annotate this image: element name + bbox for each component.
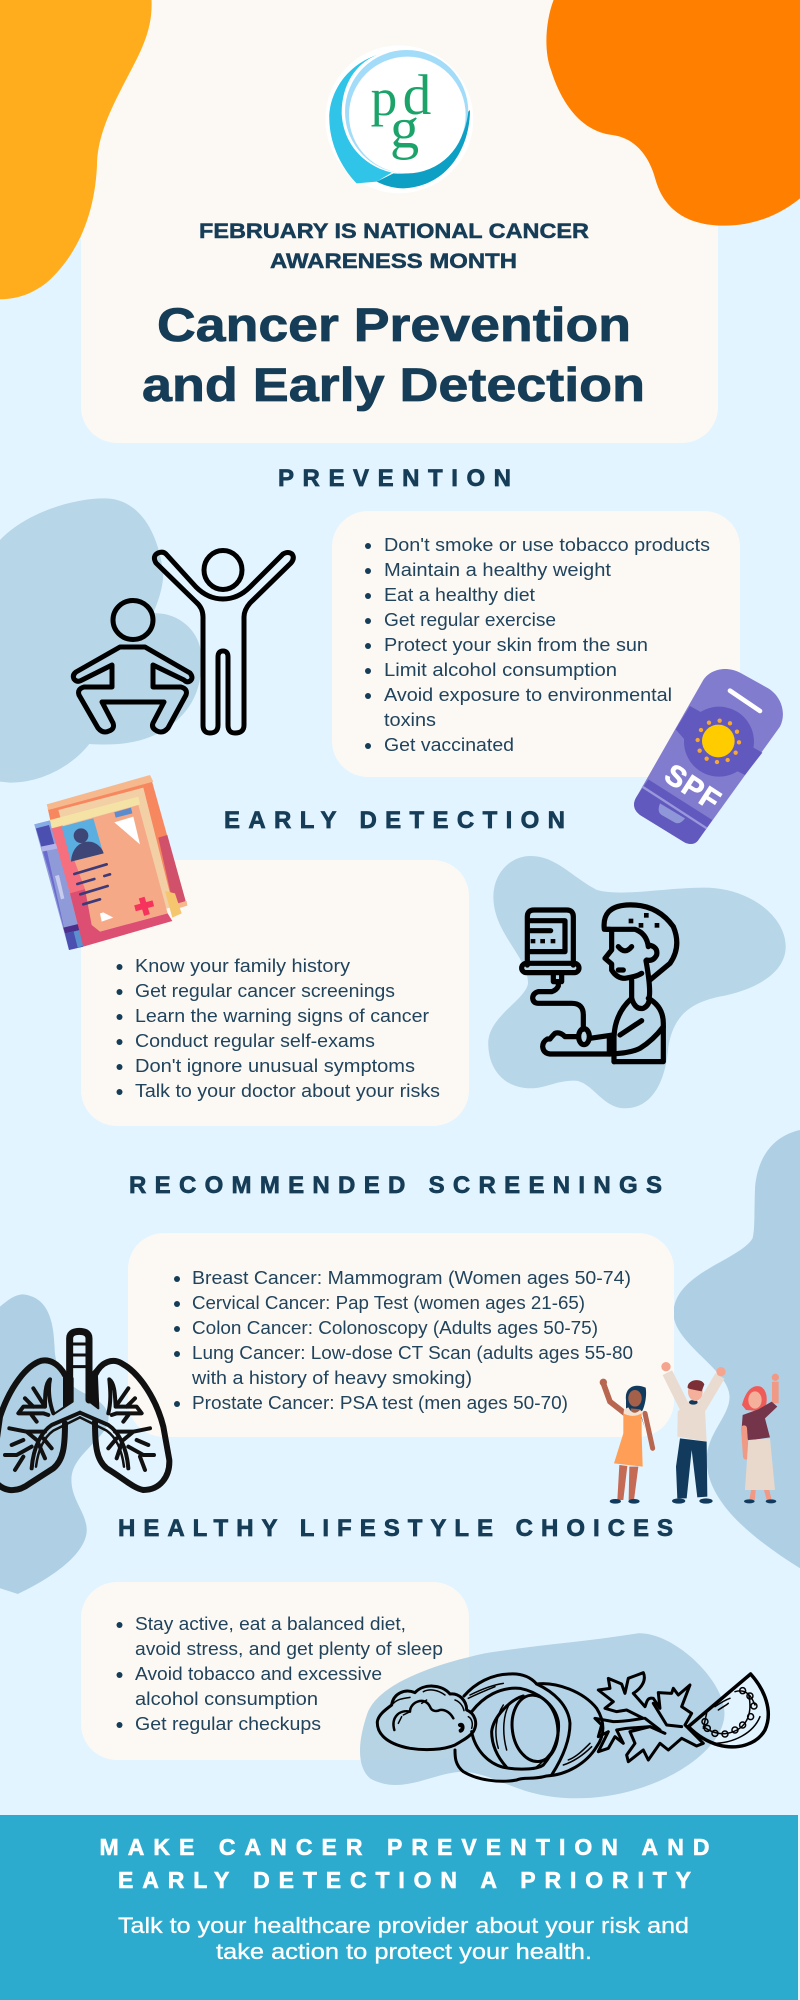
list text: Prostate Cancer: PSA test (men ages 50-70) (192, 1393, 568, 1413)
list text: Know your family history (135, 956, 350, 976)
icon: lungs (0, 1331, 169, 1490)
list text: Avoid tobacco and excessive (135, 1664, 382, 1684)
list text: Eat a healthy diet (384, 585, 535, 605)
panel: healthy lifestyle list (81, 1582, 469, 1760)
list text: alcohol consumption (135, 1689, 318, 1709)
decorative blob: orange top right (546, 0, 800, 226)
list text: Lung Cancer: Low-dose CT Scan (adults ages 55-80 (192, 1343, 633, 1363)
heading: recommended screenings: RECOMMENDED SCREENINGS (129, 1172, 662, 1199)
icon: SPF sunscreen tube (634, 669, 783, 844)
title (142, 298, 645, 411)
list text: Get vaccinated (384, 735, 514, 755)
onion (455, 1674, 603, 1781)
icon: exercising people (73, 550, 293, 733)
list text: Don't smoke or use tobacco products (384, 535, 710, 555)
list text: Colon Cancer: Colonoscopy (Adults ages 50-75) (192, 1318, 598, 1338)
icon: medical record book (34, 775, 187, 950)
list text (135, 956, 440, 1101)
blob behind exercise icon (0, 498, 202, 783)
subtitle: AWARENESS MONTH (270, 250, 517, 273)
panel: early detection list (81, 860, 469, 1126)
title: and Early Detection (142, 358, 645, 411)
icon: patient with monitor (522, 905, 677, 1062)
subtitle: FEBRUARY IS NATIONAL CANCER (199, 220, 589, 243)
heading: early detection: EARLY DETECTION (224, 807, 565, 834)
list text: Don't ignore unusual symptoms (135, 1056, 415, 1076)
footer heading: MAKE CANCER PREVENTION AND (100, 1834, 710, 1860)
bullets (116, 964, 122, 1095)
footer banner (0, 1815, 798, 2000)
footer text: Talk to your healthcare provider about your risk and (118, 1913, 689, 1938)
person: woman with red hair (742, 1374, 779, 1503)
footer text (118, 1913, 689, 1964)
heading: prevention: PREVENTION (278, 465, 511, 492)
list text: avoid stress, and get plenty of sleep (135, 1639, 443, 1659)
footer text: take action to protect your health. (216, 1939, 592, 1964)
subtitle (199, 220, 589, 273)
list text (384, 535, 710, 755)
list text: toxins (384, 710, 436, 730)
footer heading: EARLY DETECTION A PRIORITY (118, 1867, 691, 1893)
list text: Cervical Cancer: Pap Test (women ages 21-65) (192, 1293, 585, 1313)
blob: right side behind people (673, 1130, 800, 1568)
title: Cancer Prevention (157, 298, 631, 351)
blob: left side behind lungs (0, 1294, 109, 1594)
person: man in beige sweater (661, 1362, 726, 1504)
icon: food sketches (377, 1673, 768, 1781)
list text: Get regular checkups (135, 1714, 321, 1734)
person: woman in orange dress (600, 1379, 653, 1504)
panel: prevention list (332, 511, 740, 777)
logo: pdg: d (403, 64, 431, 127)
logo: pdg: g (390, 95, 419, 160)
heading: healthy lifestyle choices: HEALTHY LIFESTYLE CHOICES (118, 1515, 673, 1542)
blob behind food (360, 1633, 724, 1798)
list text (191, 1268, 633, 1413)
herb leaf (595, 1673, 703, 1762)
bullets (174, 1276, 180, 1407)
bullets (365, 543, 371, 749)
logo: pdg (325, 45, 473, 193)
bullets (116, 1622, 122, 1728)
list text: Talk to your doctor about your risks (135, 1081, 440, 1101)
icon: cheering people (600, 1362, 779, 1504)
list text: Maintain a healthy weight (384, 560, 611, 580)
panel: hero header (81, 0, 718, 443)
blob behind screening icon (488, 856, 786, 1108)
list text: Avoid exposure to environmental (384, 685, 672, 705)
footer heading (100, 1834, 710, 1893)
list text: Limit alcohol consumption (384, 660, 617, 680)
list text: Breast Cancer: Mammogram (Women ages 50-74) (192, 1268, 631, 1288)
icon: SPF sunscreen tube: SPF (659, 758, 726, 818)
list text (135, 1614, 443, 1734)
broccoli (377, 1686, 476, 1750)
list text: Protect your skin from the sun (384, 635, 648, 655)
list text: Stay active, eat a balanced diet, (135, 1614, 406, 1634)
list text: with a history of heavy smoking) (191, 1368, 472, 1388)
panel: screenings list (128, 1233, 674, 1437)
logo: pdg: p (371, 67, 397, 127)
list text: Conduct regular self-exams (135, 1031, 375, 1051)
list text: Get regular exercise (384, 610, 556, 630)
list text: Learn the warning signs of cancer (135, 1006, 429, 1026)
tomato wedge (688, 1674, 768, 1747)
decorative blob: yellow top left (0, 0, 152, 299)
list text: Get regular cancer screenings (135, 981, 395, 1001)
